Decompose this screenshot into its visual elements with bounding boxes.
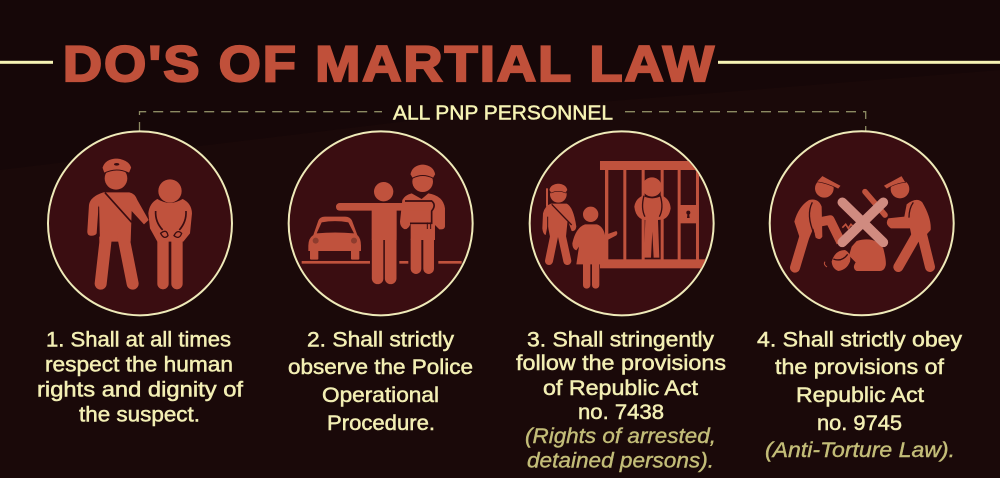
audience label: ALL PNP PERSONNEL	[393, 102, 613, 124]
audience bracket	[140, 102, 866, 132]
rule 2 text: Procedure.	[327, 412, 435, 435]
rule 3 text: no. 7438	[578, 401, 664, 424]
icon: officers beating a detainee, crossed out	[770, 131, 954, 315]
rule 2 text: observe the Police	[288, 356, 473, 379]
rule 4 text: Republic Act	[796, 384, 924, 407]
rule 1 text	[37, 329, 243, 427]
rule 3 text: follow the provisions	[516, 352, 726, 375]
rule 1 text: 1. Shall at all times	[46, 329, 231, 352]
rule 3 text	[516, 329, 726, 473]
rule 4 text: (Anti-Torture Law).	[765, 439, 955, 462]
rule 1 text: respect the human	[45, 354, 233, 377]
rule 4 text: no. 9745	[817, 412, 902, 435]
rule 4 text	[757, 329, 963, 462]
rule 3 text: detained persons).	[527, 450, 714, 473]
title rule: right	[718, 61, 1000, 64]
icon: officer, visitor and detainee behind bars	[530, 131, 714, 315]
icon: officer escorting handcuffed suspect	[48, 131, 232, 315]
rule 4 text: the provisions of	[775, 356, 944, 379]
rule 3 text: 3. Shall stringently	[527, 329, 715, 352]
rule 4 text: 4. Shall strictly obey	[757, 329, 963, 352]
panel: rule 2	[288, 131, 473, 435]
rule 2 text: 2. Shall strictly	[307, 329, 455, 352]
rule 1 text: the suspect.	[79, 404, 200, 427]
title: DO'S OF MARTIAL LAW	[63, 36, 716, 92]
panel: rule 1	[37, 131, 243, 427]
panel: rule 4	[757, 131, 963, 462]
rule 3 text: (Rights of arrested,	[525, 425, 716, 448]
rule 2 text	[288, 329, 473, 435]
panel: rule 3	[516, 131, 726, 473]
rule 1 text: rights and dignity of	[37, 379, 243, 402]
rule 2 text: Operational	[322, 384, 439, 407]
icon: officer and civilian stopping a car	[289, 131, 473, 315]
title rule: left	[0, 61, 53, 64]
rule 3 text: of Republic Act	[543, 377, 698, 400]
